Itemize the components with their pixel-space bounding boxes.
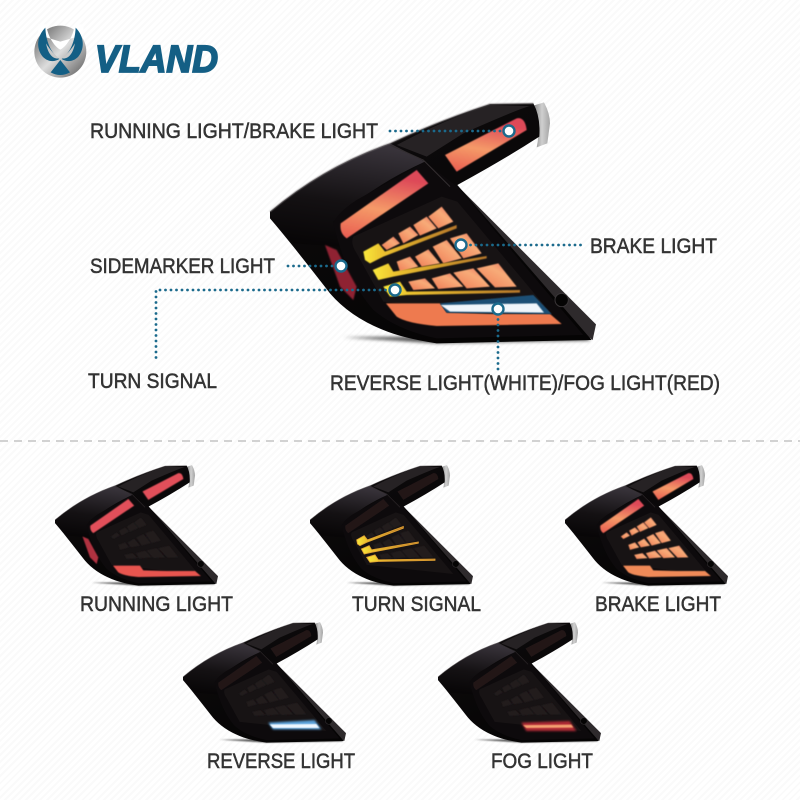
panel: reverse light: [183, 622, 355, 773]
panel: fog light: [438, 622, 601, 773]
caption: reverse light: REVERSE LIGHT: [207, 750, 355, 773]
panel: brake light: [565, 465, 728, 616]
caption: turn signal: TURN SIGNAL: [352, 593, 481, 616]
leader: turn signal: [156, 284, 400, 362]
leader: running/brake light: [390, 126, 514, 136]
logo emblem: [34, 24, 86, 78]
panel: turn signal: [310, 465, 481, 616]
lamp: running light: [55, 465, 218, 586]
brake light cells: [382, 207, 517, 290]
leader: reverse/fog light: [492, 304, 504, 372]
leader: sidemarker light: [288, 260, 346, 272]
label: brake light: BRAKE LIGHT: [590, 235, 717, 258]
label: sidemarker light: SIDEMARKER LIGHT: [90, 255, 275, 278]
main tail light: [270, 102, 596, 343]
logo wordmark: VLAND: [95, 39, 218, 81]
caption: brake light: BRAKE LIGHT: [595, 593, 721, 616]
lamp: turn signal: [310, 465, 473, 586]
panel: running light: [55, 465, 233, 616]
label: reverse/fog light: REVERSE LIGHT(WHITE)/FOG LIGHT(RED): [330, 372, 720, 395]
lamp: reverse light: [183, 622, 346, 743]
label: running/brake light: RUNNING LIGHT/BRAKE LIGHT: [90, 120, 378, 143]
lamp: fog light: [438, 622, 601, 743]
logo: [34, 24, 218, 81]
turn signal arrows: [363, 225, 520, 297]
leader: brake light: [456, 240, 581, 250]
label: turn signal: TURN SIGNAL: [88, 370, 217, 393]
lamp: brake light: [565, 465, 728, 586]
sidemarker light: [325, 245, 357, 300]
caption: running light: RUNNING LIGHT: [80, 593, 233, 616]
rear strip light: [386, 295, 562, 326]
caption: fog light: FOG LIGHT: [491, 750, 593, 773]
